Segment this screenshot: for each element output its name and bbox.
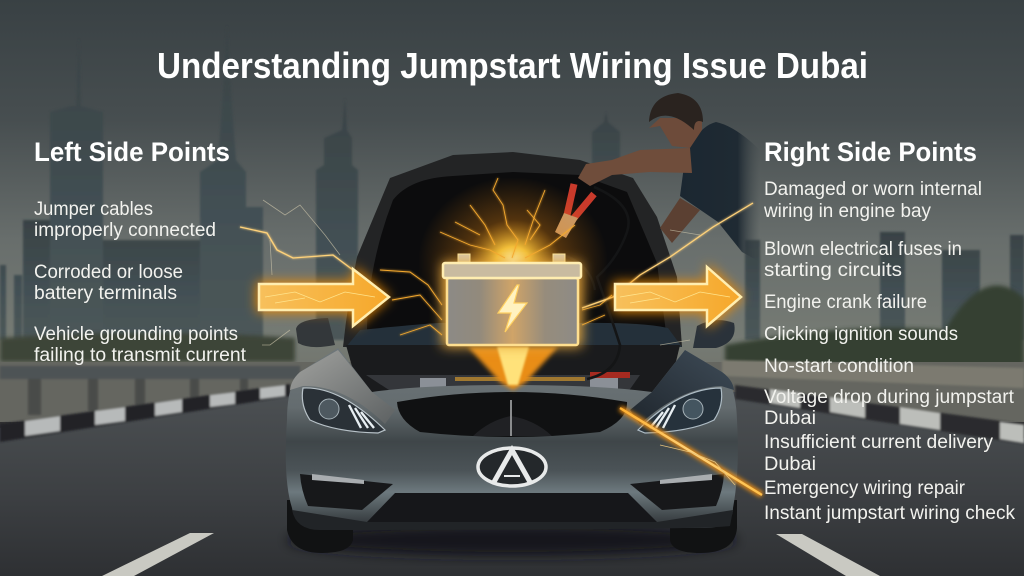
main arm <box>578 148 692 186</box>
mechanic <box>578 93 760 262</box>
background: city skyline <box>0 25 1024 340</box>
right headlight <box>638 388 722 433</box>
right mirror <box>693 320 735 348</box>
right point 1: wiring in engine bay <box>763 201 931 222</box>
left point 1: Jumper cables <box>34 199 153 220</box>
left fender highlight <box>290 350 395 424</box>
right point 4: Clicking ignition sounds <box>764 324 958 345</box>
left point 1: improperly connected <box>34 220 216 241</box>
right point 6: Voltage drop during jumpstart <box>764 387 1015 408</box>
background: road shoulder <box>0 362 1024 422</box>
tyres <box>287 500 353 553</box>
head <box>649 118 702 148</box>
title: Understanding Jumpstart Wiring Issue Dubai <box>157 45 868 86</box>
right guardrail <box>722 360 1024 444</box>
panel: right side points <box>763 137 1016 524</box>
panel: left side points <box>34 137 247 366</box>
lower grille <box>367 493 657 522</box>
left point 3: failing to transmit current <box>34 345 247 366</box>
road lane markings <box>102 533 880 576</box>
ground shadow <box>287 524 737 556</box>
right fender reflection <box>630 350 734 424</box>
background: road <box>0 392 1024 576</box>
hood inner panel <box>367 172 667 340</box>
left point 2: battery terminals <box>34 283 177 304</box>
right arrow <box>613 264 743 329</box>
fog light intakes <box>300 474 393 510</box>
right point 5: No-start condition <box>764 356 914 377</box>
heading: right side points: Right Side Points <box>764 137 977 167</box>
background: sky <box>0 0 1024 400</box>
energy streak on bumper <box>620 408 762 495</box>
windscreen reflection band <box>346 323 682 347</box>
lightning bolts <box>380 178 612 335</box>
right point 1: Damaged or worn internal <box>764 179 982 200</box>
left mirror <box>296 318 335 347</box>
lower energy column <box>468 347 558 390</box>
right point 8: Emergency wiring repair <box>764 478 966 499</box>
left headlight <box>302 388 385 433</box>
left point 3: Vehicle grounding points <box>34 324 238 345</box>
left point 2: Corroded or loose <box>34 262 183 283</box>
bumper lip <box>292 510 733 530</box>
background: distant trees <box>0 286 1024 368</box>
left guardrail <box>0 366 300 442</box>
right point 3: Engine crank failure <box>764 292 927 313</box>
heading: left side points: Left Side Points <box>34 137 230 167</box>
torso <box>680 122 760 262</box>
car body <box>286 348 738 528</box>
left arrow <box>257 266 390 329</box>
right point 6: Dubai <box>764 408 816 429</box>
battery icon <box>442 254 582 347</box>
right point 2: starting circuits <box>764 260 902 281</box>
right point 9: Instant jumpstart wiring check <box>764 503 1016 524</box>
right point 2: Blown electrical fuses in <box>764 239 962 260</box>
right point 7: Dubai <box>764 454 816 475</box>
hood open <box>343 152 682 347</box>
glow behind battery <box>418 177 608 347</box>
hood opening <box>397 392 627 437</box>
jumper clamp and cable <box>555 184 629 379</box>
engine bay <box>346 345 680 395</box>
car <box>286 152 738 556</box>
back arm <box>660 198 700 243</box>
logo <box>478 448 546 486</box>
right point 7: Insufficient current delivery <box>764 432 993 453</box>
